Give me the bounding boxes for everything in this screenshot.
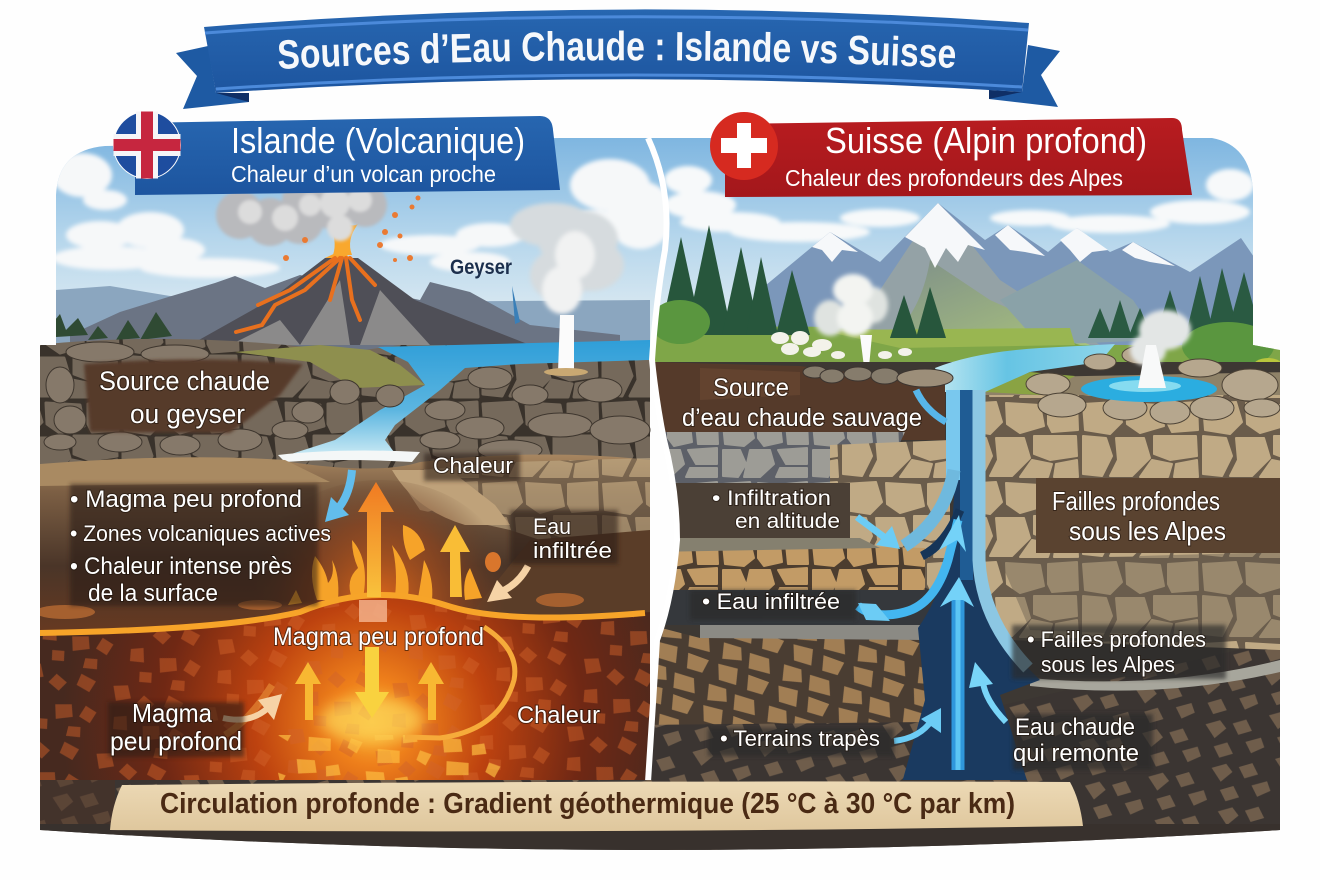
arrow: trapped terrain	[894, 708, 941, 741]
failles grey line	[1030, 660, 1280, 691]
label: source sauvage: Source	[713, 374, 789, 402]
left soil layer	[650, 362, 945, 440]
rocks right of river	[385, 360, 649, 455]
upper branch	[904, 470, 954, 546]
label: magma peu profond: Magma	[132, 698, 212, 728]
caption: Circulation profonde : Gradient géothermique (25 °C à 30 °C par km)	[160, 788, 1015, 820]
label: failles large: Failles profondes	[1052, 486, 1220, 516]
magma chamber	[40, 598, 650, 780]
river, Switzerland	[935, 344, 1115, 392]
glow core	[320, 698, 424, 742]
label: eau infiltrée	[533, 514, 612, 563]
labels: Islande	[70, 256, 612, 756]
white stones on meadow	[771, 331, 912, 359]
spring branch	[916, 390, 946, 422]
dark rocky ground	[36, 339, 650, 480]
tan rock layer	[650, 540, 925, 592]
label: source chaude: ou geyser	[130, 399, 245, 429]
tan stones next to fissure	[830, 440, 950, 600]
arrow: rising hot water	[969, 662, 1006, 722]
icon: alpine mountains	[760, 203, 1256, 345]
label: failles large	[1052, 486, 1226, 546]
magma edge line	[40, 595, 645, 633]
deep left rock	[650, 625, 925, 732]
sky and clouds, Switzerland	[664, 138, 1253, 312]
label: infiltration: en altitude	[735, 510, 840, 533]
eruption fire	[333, 224, 358, 255]
river	[285, 340, 650, 456]
subheading: Chaleur des profondeurs des Alpes	[785, 165, 1123, 191]
heat area	[276, 481, 489, 613]
header: Suisse	[710, 112, 1192, 197]
label: eau chaude: Eau chaude	[1015, 714, 1135, 741]
icon: Iceland flag	[114, 112, 180, 178]
channel light left	[946, 390, 961, 480]
arrow: blue drip	[325, 470, 352, 522]
bullet list: • Chaleur intense près	[70, 553, 292, 580]
magma rocks at core	[278, 735, 500, 780]
ribbon red	[725, 118, 1192, 197]
bullet list: • Magma peu profond	[70, 486, 302, 513]
flames	[288, 525, 482, 605]
smoke plume	[214, 192, 388, 248]
title banner	[176, 9, 1060, 109]
label: chaleur: Chaleur	[517, 702, 600, 729]
subheading: Chaleur d’un volcan proche	[231, 161, 496, 187]
panel: Suisse	[651, 138, 1280, 780]
ring of stones	[1026, 346, 1280, 424]
label: terrains: • Terrains trapès	[720, 726, 880, 751]
label patches Iceland	[70, 453, 618, 757]
rock base behind pool	[985, 372, 1290, 420]
arrow: infiltration	[857, 517, 900, 549]
left spring stones	[803, 366, 953, 387]
rock base	[640, 362, 1290, 790]
bullet list: • Zones volcaniques actives	[70, 521, 331, 546]
orange pebbles near heat	[35, 552, 584, 619]
grey stone layer	[650, 432, 905, 490]
icon: left hot spring steam	[814, 274, 888, 367]
label: infiltration: • Infiltration	[712, 487, 831, 510]
bullet list	[70, 486, 331, 607]
center divider	[648, 138, 677, 782]
banner body	[204, 9, 1029, 93]
brown band	[1036, 478, 1280, 553]
label: failles bullet: • Failles profondes	[1027, 627, 1206, 652]
label: Geyser: Geyser	[450, 256, 512, 279]
left dark layer	[655, 483, 850, 540]
label: eau infiltrée: infiltrée	[533, 538, 612, 563]
arrow: water infiltration, Iceland	[487, 566, 528, 602]
label: magma peu profond: peu profond	[110, 726, 242, 756]
icon: ferns	[56, 312, 172, 340]
label: chaleur surface: Chaleur	[433, 453, 513, 478]
channel centre	[960, 390, 973, 580]
magma arrows	[295, 647, 444, 720]
lava sparks	[283, 196, 420, 262]
bullet list: de la surface	[88, 580, 218, 607]
label: infiltration	[712, 487, 840, 533]
label: eau infiltrée: Eau	[533, 514, 571, 539]
bottom dark rock	[640, 640, 1280, 860]
heading: Suisse (Alpin profond)	[825, 120, 1147, 161]
tan cobble strips	[40, 457, 650, 584]
slate layer	[650, 590, 930, 625]
geyser pointer	[512, 286, 520, 324]
mossy strip	[235, 345, 425, 388]
label: source chaude: Source chaude	[99, 366, 270, 396]
curved magma outline	[405, 627, 515, 738]
icon: geyser plume	[510, 203, 624, 376]
label: eau infiltrée: • Eau infiltrée	[702, 589, 840, 614]
arrow: magma pointer	[223, 694, 282, 720]
label: magma chamber: Magma peu profond	[273, 623, 484, 651]
label: eau chaude	[1013, 714, 1139, 767]
ribbon blue	[135, 116, 560, 195]
label: source chaude	[99, 366, 270, 429]
heat arrows up	[358, 482, 470, 597]
conifers right	[1088, 268, 1262, 338]
right rock layers	[985, 395, 1280, 650]
header: Islande	[114, 112, 560, 195]
labels: Suisse	[682, 374, 1226, 767]
label: eau chaude: qui remonte	[1013, 740, 1139, 767]
label: failles bullet: sous les Alpes	[1041, 652, 1175, 677]
loose stones	[44, 342, 650, 460]
label patches Switzerland	[690, 590, 1226, 770]
banner tails	[176, 45, 1060, 109]
heading: Islande (Volcanique)	[231, 120, 525, 161]
hot water channels	[858, 390, 1028, 770]
panel: Islande	[40, 138, 663, 780]
arrow: infiltrated water	[858, 603, 890, 621]
sky and clouds, Iceland	[56, 138, 663, 344]
conifers left	[662, 225, 946, 338]
label: failles bullet	[1027, 627, 1206, 677]
title arc guide	[278, 60, 955, 69]
deep fissure	[900, 390, 1040, 790]
grass by river	[985, 372, 1075, 395]
icon: Swiss flag	[710, 112, 778, 180]
bottom banner	[110, 781, 1083, 831]
label: source sauvage	[682, 374, 922, 432]
soil band	[36, 454, 650, 645]
bushes	[650, 300, 1284, 378]
label patch: source chaude	[84, 360, 303, 433]
base band under the caption	[40, 780, 1280, 850]
main rising stream	[952, 600, 964, 770]
arrows: rising water	[939, 515, 974, 607]
meadow	[655, 326, 1280, 362]
label: failles large: sous les Alpes	[1069, 516, 1226, 546]
channel right stripe	[979, 390, 1028, 668]
distant mountains	[56, 286, 650, 345]
label: source sauvage: d’eau chaude sauvage	[682, 404, 922, 432]
icon: hot pool	[1081, 310, 1217, 402]
pale vent	[359, 600, 387, 622]
bright branch	[858, 520, 958, 615]
parchment	[110, 781, 1083, 831]
river foam	[278, 451, 420, 462]
icon: volcano	[70, 181, 620, 350]
title: Sources d’Eau Chaude : Islande vs Suisse	[278, 30, 955, 69]
arc streak	[225, 685, 272, 735]
label: magma peu profond	[110, 698, 242, 756]
banner stripes	[205, 17, 1028, 89]
